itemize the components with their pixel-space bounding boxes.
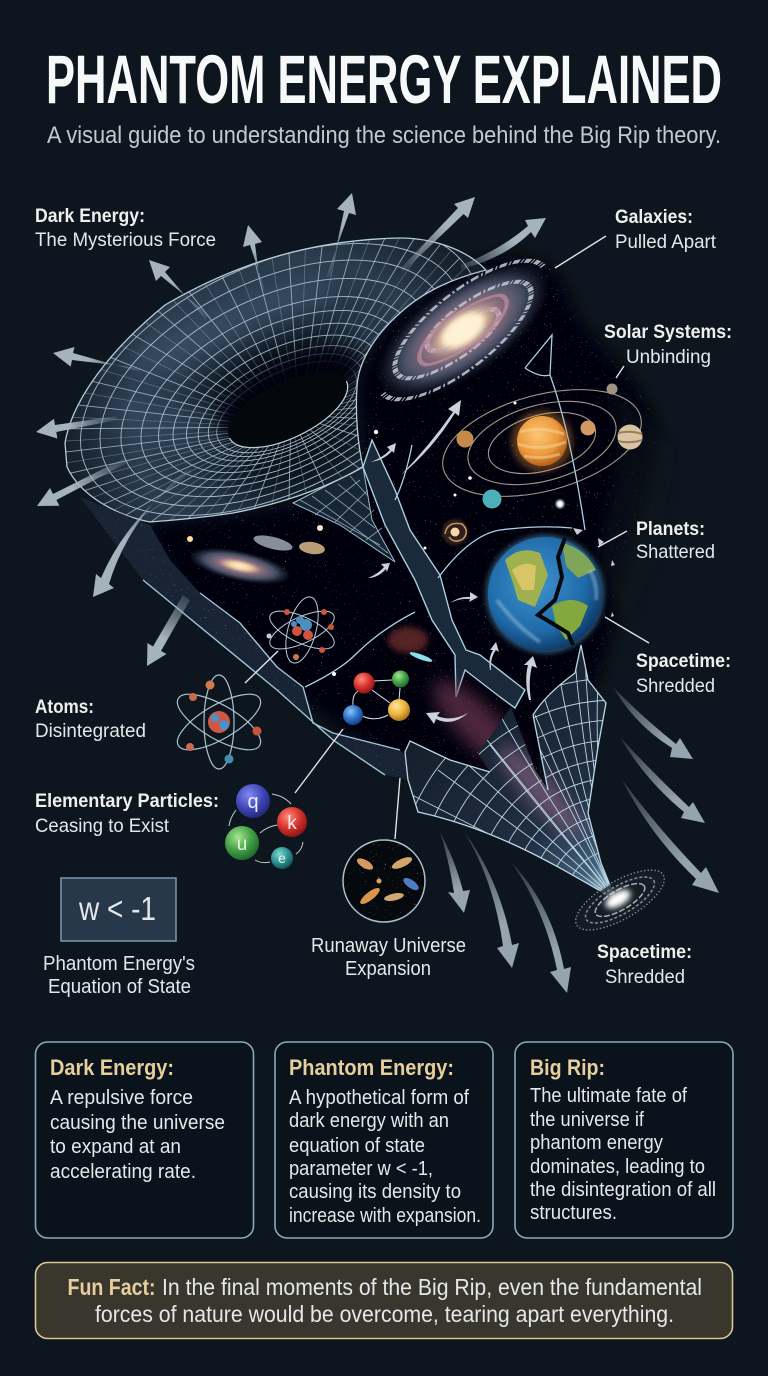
label: planets: [636, 518, 715, 563]
panel: phantom energy: Phantom Energy:: [289, 1055, 454, 1080]
label: runaway universe expansion: Expansion: [345, 958, 431, 980]
label: elementary particles: [35, 790, 219, 837]
label: atoms: Disintegrated: [35, 720, 146, 742]
panel: phantom energy: increase with expansion.: [289, 1205, 481, 1227]
label: equation of state: Phantom Energy's: [43, 953, 195, 975]
callout: fun fact: Fun Fact:: [68, 1274, 156, 1300]
lower spacetime funnel: [404, 644, 614, 898]
callout: fun fact: In the final moments of the Big Rip, even the fundamental: [162, 1274, 702, 1300]
panel: big rip: phantom energy: [530, 1132, 663, 1154]
panel: phantom energy: parameter w < -1,: [289, 1158, 433, 1180]
panel: phantom energy: causing its density to: [289, 1181, 461, 1203]
label: elementary particles: Elementary Particles:: [35, 790, 219, 812]
label: solar systems: [604, 321, 732, 368]
panel: big rip: dominates, leading to: [530, 1156, 705, 1178]
panel: phantom energy: [275, 1042, 493, 1238]
panel: phantom energy: dark energy with an: [289, 1110, 449, 1132]
torn fabric bands: [70, 335, 585, 790]
panel: dark energy: A repulsive force: [50, 1087, 193, 1109]
label: spacetime lower: [597, 941, 692, 988]
label: galaxies: [615, 206, 717, 253]
label: spacetime upper: Spacetime:: [636, 650, 731, 672]
label: galaxies: Pulled Apart: [615, 231, 717, 253]
equation box: [61, 878, 176, 941]
panel: big rip: structures.: [530, 1202, 617, 1224]
label: galaxies: Galaxies:: [615, 206, 693, 228]
starfield panel: [146, 252, 661, 774]
panel: dark energy: Dark Energy:: [50, 1055, 174, 1080]
label: equation of state: [43, 953, 195, 998]
label: dark energy: The Mysterious Force: [35, 229, 216, 251]
atom in panel: [265, 594, 339, 666]
panel: dark energy: causing the universe: [50, 1112, 225, 1134]
label: solar systems: Unbinding: [626, 346, 711, 368]
panel: big rip: [515, 1042, 733, 1238]
label: planets: Shattered: [636, 541, 715, 563]
nebula: [388, 627, 535, 782]
funnel: upper spacetime grid: [64, 237, 488, 562]
panel: dark energy: [36, 1042, 254, 1238]
equation box: w < -1: [78, 890, 156, 927]
label: spacetime upper: Shredded: [636, 675, 715, 697]
leader lines: [245, 236, 649, 839]
panel: phantom energy: equation of state: [289, 1135, 425, 1157]
icon: elementary particles: k: [287, 813, 297, 834]
label: solar systems: Solar Systems:: [604, 321, 732, 343]
icon: elementary particles: u: [237, 834, 247, 855]
label: runaway universe expansion: [311, 935, 466, 980]
icon: atom: [170, 675, 268, 769]
panel: dark energy: accelerating rate.: [50, 1161, 196, 1183]
icon: galaxies in circle: [342, 839, 426, 923]
label: spacetime upper: [636, 650, 731, 697]
label: dark energy: [35, 205, 216, 251]
label: spacetime lower: Spacetime:: [597, 941, 692, 963]
panel: dark energy: to expand at an: [50, 1136, 181, 1158]
subtitle: A visual guide to understanding the science behind the Big Rip theory.: [47, 122, 721, 149]
panel: big rip: The ultimate fate of: [530, 1085, 687, 1107]
icon: elementary particles: e: [278, 850, 286, 866]
label: atoms: [35, 696, 146, 742]
central illustration: torn spacetime: [36, 193, 719, 993]
panel: big rip: the disintegration of all: [530, 1179, 716, 1201]
label: equation of state: Equation of State: [48, 976, 191, 998]
label: runaway universe expansion: Runaway Universe: [311, 935, 466, 957]
small galaxy at funnel tip: [567, 859, 673, 941]
panel: big rip: Big Rip:: [530, 1055, 605, 1080]
label: planets: Planets:: [636, 518, 705, 540]
label: atoms: Atoms:: [35, 696, 94, 718]
label: elementary particles: Ceasing to Exist: [35, 815, 170, 837]
label: spacetime lower: Shredded: [605, 966, 685, 988]
particles in pocket: [343, 670, 410, 725]
label: dark energy: Dark Energy:: [35, 205, 145, 227]
callout: fun fact: forces of nature would be overcome, tearing apart everything.: [95, 1301, 674, 1327]
callout: fun fact: [36, 1262, 732, 1338]
panel: phantom energy: A hypothetical form of: [289, 1087, 469, 1109]
expansion arrows: [36, 193, 719, 993]
panel: big rip: the universe if: [530, 1109, 644, 1131]
icon: elementary particles: [225, 784, 307, 869]
earth shattered: [486, 528, 615, 653]
small white arrows: [368, 400, 537, 724]
icon: elementary particles: q: [247, 791, 259, 813]
distant galaxies: [186, 525, 326, 591]
galaxy: [356, 237, 570, 423]
solar system: [431, 370, 653, 545]
